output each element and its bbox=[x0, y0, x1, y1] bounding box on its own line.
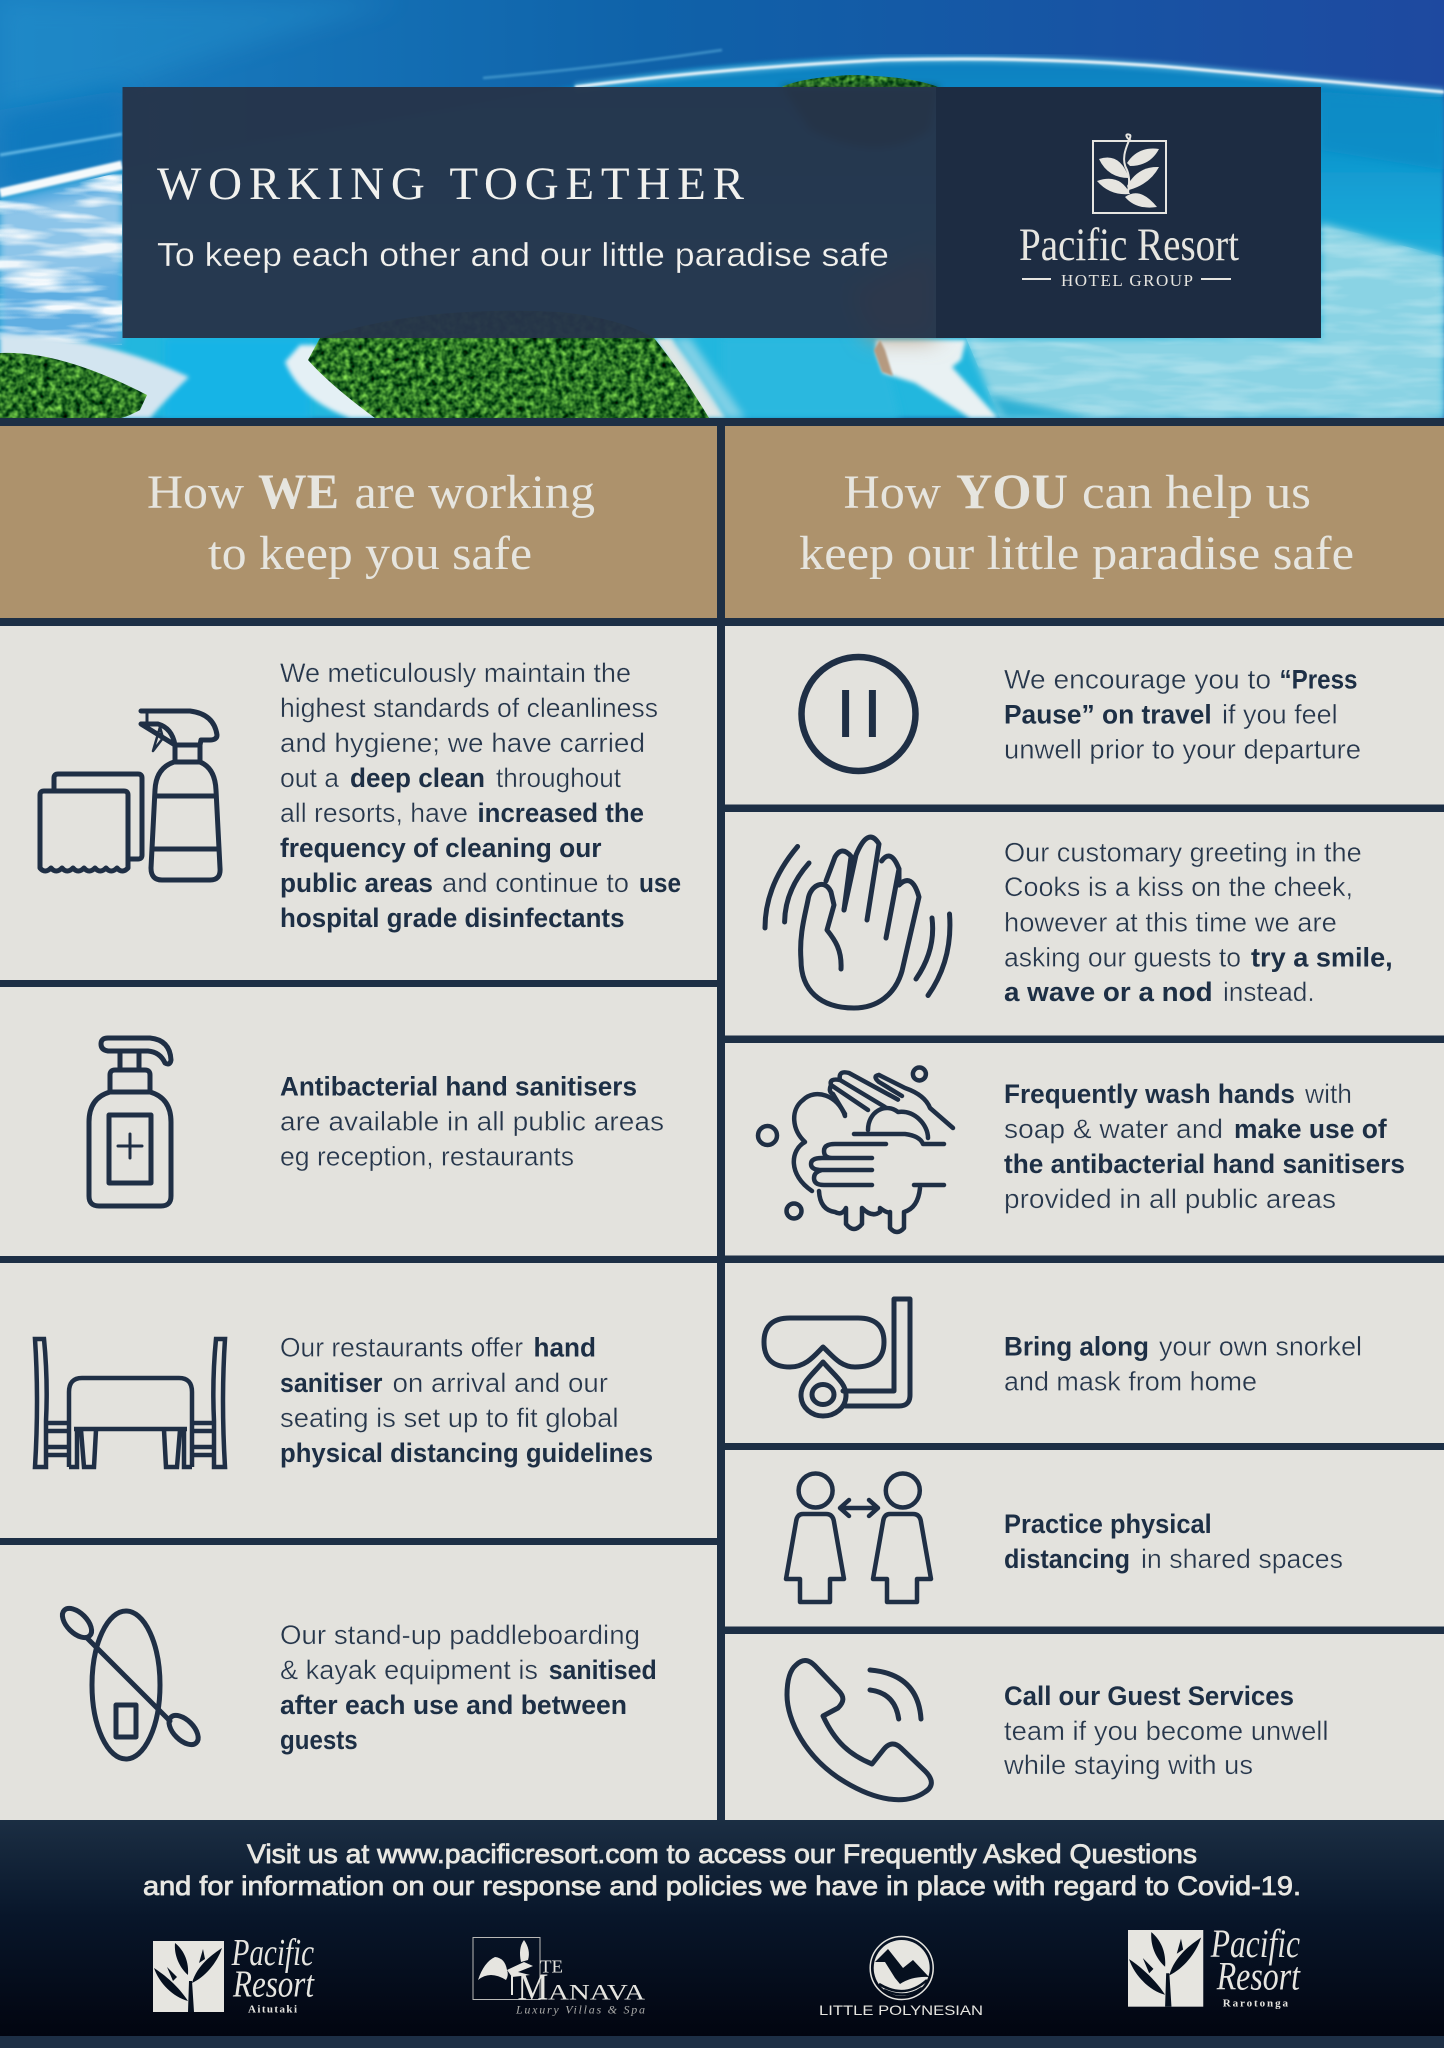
subtitle: To keep each other and our little paradise safe bbox=[157, 236, 889, 273]
banner left translucent panel bbox=[122, 87, 936, 338]
text: snorkel bbox=[1004, 1332, 1362, 1396]
text: cleaning: out a bbox=[280, 763, 340, 793]
panel: cleaning bbox=[40, 658, 681, 933]
heading panel: how you can help bbox=[725, 426, 1444, 618]
logo: Pacific Resort Aitutaki: Resort bbox=[232, 1964, 315, 2006]
text: cleaning: all resorts, have bbox=[280, 798, 468, 828]
footer text: Visit us at www.pacificresort.com to access our Frequently Asked Questions bbox=[247, 1839, 1197, 1869]
text: wash hands: soap & water and bbox=[1004, 1114, 1223, 1144]
text: paddleboards: Our stand-up paddleboarding bbox=[280, 1620, 640, 1650]
heading panel: how you can help: can help us bbox=[1082, 466, 1311, 519]
logo: Te Manava: TE bbox=[540, 1957, 563, 1977]
text: greeting: instead. bbox=[1223, 977, 1315, 1007]
panel: snorkel bbox=[764, 1299, 1362, 1416]
text: greeting: Our customary greeting in the bbox=[1004, 838, 1362, 868]
logo: Pacific Resort Rarotonga: Pacific bbox=[1210, 1921, 1300, 1966]
text: restaurants: Our restaurants offer bbox=[280, 1332, 523, 1362]
text: press pause: We encourage you to bbox=[1004, 664, 1271, 694]
icon: table and chairs bbox=[35, 1339, 225, 1467]
text: press pause: Pause” on travel bbox=[1004, 700, 1212, 730]
text: paddleboards: after each use and between bbox=[280, 1690, 627, 1720]
footer text bbox=[143, 1839, 1301, 1901]
panel: press pause bbox=[802, 657, 1361, 771]
logo: Pacific Resort Aitutaki: Pacific bbox=[231, 1932, 314, 1974]
navy frame bars bbox=[0, 418, 1444, 1820]
logo mark: framed plant bbox=[1093, 134, 1166, 213]
text: hand sanitisers: Antibacterial hand sanitisers bbox=[280, 1072, 637, 1102]
text: restaurants: seating is set up to fit global bbox=[280, 1403, 618, 1433]
panel: call guest services bbox=[787, 1660, 1328, 1800]
icon: washing hands with soap bbox=[758, 1068, 953, 1232]
logo: Te Manava: M bbox=[517, 1966, 548, 2008]
panel: hand sanitisers bbox=[89, 1038, 664, 1206]
text: snorkel: and mask from home bbox=[1004, 1366, 1257, 1396]
text: cleaning: frequency of cleaning our bbox=[280, 833, 602, 863]
logo: Pacific Resort Aitutaki bbox=[153, 1932, 315, 2016]
text: snorkel: your own snorkel bbox=[1159, 1332, 1362, 1362]
heading panel: how you can help: How bbox=[844, 466, 941, 519]
heading panel: how we are working: are working bbox=[354, 466, 595, 519]
icon: snorkel and mask bbox=[764, 1299, 910, 1416]
text: wash hands bbox=[1004, 1079, 1405, 1214]
heading panel: how you can help: YOU bbox=[956, 463, 1068, 519]
text: press pause: if you feel bbox=[1222, 700, 1338, 730]
text: restaurants: physical distancing guidelines bbox=[280, 1438, 653, 1468]
text: hand sanitisers: eg reception, restaurants bbox=[280, 1142, 574, 1172]
text: paddleboards: & kayak equipment is bbox=[280, 1655, 538, 1685]
panel: restaurants bbox=[35, 1332, 653, 1468]
text: greeting: a wave or a nod bbox=[1004, 977, 1213, 1007]
logo: Pacific Resort Rarotonga bbox=[1128, 1921, 1301, 2010]
icon: two people with arrow bbox=[786, 1474, 931, 1602]
text: physical distancing: distancing bbox=[1004, 1544, 1130, 1574]
icon: pump bottle bbox=[89, 1038, 171, 1206]
logo: Te Manava: ANAVA bbox=[548, 1979, 645, 2004]
text: cleaning: highest standards of cleanliness bbox=[280, 693, 658, 723]
banner logo panel bbox=[936, 87, 1321, 338]
heading panel: how we are working: to keep you safe bbox=[208, 527, 532, 580]
text: restaurants bbox=[280, 1332, 653, 1468]
text: physical distancing: in shared spaces bbox=[1141, 1544, 1343, 1574]
text: cleaning: increased the bbox=[478, 798, 644, 828]
text: wash hands: the antibacterial hand sanitisers bbox=[1004, 1149, 1405, 1179]
text: greeting: try a smile, bbox=[1251, 942, 1393, 972]
text: call guest services: while staying with us bbox=[1003, 1750, 1253, 1780]
text: wash hands: provided in all public areas bbox=[1004, 1184, 1336, 1214]
text: greeting bbox=[1004, 838, 1393, 1007]
text: physical distancing: Practice physical bbox=[1004, 1509, 1212, 1539]
panel: greeting bbox=[765, 837, 1393, 1008]
title banner bbox=[122, 87, 1321, 338]
heading panel: how we are working: WE bbox=[258, 463, 339, 519]
text: cleaning: public areas bbox=[280, 868, 433, 898]
text: wash hands: with bbox=[1304, 1079, 1352, 1109]
text: cleaning bbox=[280, 658, 681, 933]
icon: pause button bbox=[802, 657, 916, 771]
text: restaurants: hand bbox=[534, 1332, 596, 1362]
text: wash hands: Frequently wash hands bbox=[1004, 1079, 1295, 1109]
text: hand sanitisers: are available in all public areas bbox=[280, 1106, 664, 1136]
text: call guest services: team if you become unwell bbox=[1004, 1716, 1328, 1746]
footer text: and for information on our response and policies we have in place with regard to Covid-19. bbox=[143, 1871, 1301, 1901]
text: cleaning: use bbox=[639, 868, 681, 898]
footer bbox=[0, 1820, 1444, 2048]
hero photo: aerial lagoon bbox=[0, 0, 1444, 418]
text: snorkel: Bring along bbox=[1004, 1332, 1149, 1362]
text: greeting: however at this time we are bbox=[1004, 908, 1337, 938]
text: hand sanitisers bbox=[280, 1072, 664, 1172]
text: cleaning: We meticulously maintain the bbox=[280, 658, 631, 688]
panel: paddleboards bbox=[57, 1603, 657, 1759]
main title: WORKING TOGETHER bbox=[157, 158, 745, 210]
heading panel: how you can help: keep our little paradise safe bbox=[799, 527, 1354, 580]
text: greeting: Cooks is a kiss on the cheek, bbox=[1004, 872, 1353, 902]
text: press pause: “Press bbox=[1280, 664, 1358, 694]
text: call guest services: Call our Guest Services bbox=[1004, 1681, 1294, 1711]
heading panel: how we are working bbox=[0, 426, 717, 618]
text: paddleboards bbox=[280, 1620, 657, 1755]
icon: paddleboard and paddle bbox=[57, 1603, 203, 1759]
text: press pause bbox=[1004, 664, 1361, 764]
text: cleaning: and hygiene; we have carried bbox=[280, 728, 645, 758]
text: call guest services bbox=[1003, 1681, 1328, 1780]
text: restaurants: sanitiser bbox=[280, 1368, 383, 1398]
text: cleaning: throughout bbox=[496, 763, 621, 793]
icon: cloths and spray bottle bbox=[40, 711, 220, 880]
panel: wash hands bbox=[758, 1068, 1405, 1232]
text: restaurants: on arrival and our bbox=[392, 1368, 608, 1398]
panel: physical distancing bbox=[786, 1474, 1343, 1602]
text: physical distancing bbox=[1004, 1509, 1343, 1574]
logo: Pacific Resort Aitutaki: Aitutaki bbox=[248, 2004, 297, 2016]
text: paddleboards: guests bbox=[280, 1725, 358, 1755]
icon: phone bbox=[787, 1660, 931, 1800]
text: cleaning: and continue to bbox=[442, 868, 629, 898]
logo: Pacific Resort Rarotonga: Resort bbox=[1216, 1953, 1301, 1998]
text: greeting: asking our guests to bbox=[1004, 942, 1241, 972]
logo wordmark: Pacific Resort bbox=[1019, 219, 1239, 271]
logo: Pacific Resort Rarotonga: Rarotonga bbox=[1223, 1998, 1288, 2010]
text: wash hands: make use of bbox=[1234, 1114, 1388, 1144]
logo tagline: HOTEL GROUP bbox=[1061, 271, 1193, 290]
text: press pause: unwell prior to your departure bbox=[1004, 734, 1361, 764]
text: cleaning: hospital grade disinfectants bbox=[280, 903, 624, 933]
text: paddleboards: sanitised bbox=[549, 1655, 657, 1685]
icon: waving hand bbox=[765, 837, 950, 1008]
Pacific Resort Hotel Group logo bbox=[1019, 134, 1239, 290]
heading panel: how we are working: How bbox=[147, 466, 244, 519]
logo: Little Polynesian: LITTLE POLYNESIAN bbox=[819, 2002, 983, 2018]
logo: Te Manava bbox=[473, 1938, 645, 2016]
logo: Te Manava: Luxury Villas & Spa bbox=[515, 2002, 645, 2016]
text: cleaning: deep clean bbox=[350, 763, 485, 793]
logo: Little Polynesian bbox=[819, 1936, 983, 2018]
